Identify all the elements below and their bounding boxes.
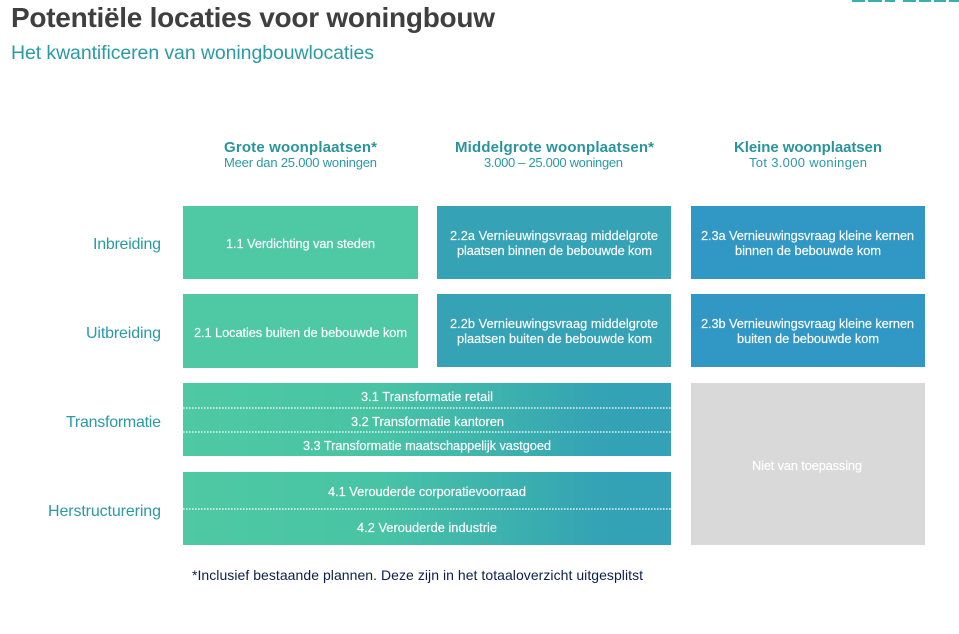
panel: 2.3b: 2.3b Vernieuwingsvraag kleine kernen <box>701 316 914 331</box>
3.2 label: 3.2 Transformatie kantoren <box>351 414 504 429</box>
panel: 2.3a: 2.3a Vernieuwingsvraag kleine kernen <box>701 228 914 243</box>
footnote: *Inclusief bestaande plannen. Deze zijn in het totaaloverzicht uitgesplitst <box>192 567 643 583</box>
column header: Middelgrote woonplaatsen: 3.000 – 25.000 woningen <box>484 155 623 170</box>
panel: 2.3b <box>691 294 925 367</box>
3.3 label: 3.3 Transformatie maatschappelijk vastgoed <box>303 438 551 453</box>
3.1 label: 3.1 Transformatie retail <box>361 389 493 404</box>
column header: Grote woonplaatsen: Grote woonplaatsen* <box>224 139 377 156</box>
row label: Herstructurering: Herstructurering <box>48 503 161 520</box>
panel: 2.2b: plaatsen buiten de bebouwde kom <box>457 331 652 346</box>
column header: Grote woonplaatsen <box>224 139 377 170</box>
column header: Kleine woonplaatsen: Kleine woonplaatsen <box>734 139 882 156</box>
panel: 2.2a <box>437 206 671 279</box>
panel: 2.2b <box>437 294 671 367</box>
panel: niet van toepassing <box>691 383 925 545</box>
panel: 2.2a: 2.2a Vernieuwingsvraag middelgrote <box>450 228 658 243</box>
panel: transformatie <box>183 383 671 456</box>
row label: Uitbreiding: Uitbreiding <box>86 325 161 342</box>
panel: 1.1 <box>183 206 418 279</box>
row label: Inbreiding: Inbreiding <box>93 236 161 253</box>
column header: Grote woonplaatsen: Meer dan 25.000 woningen <box>224 155 377 170</box>
panel: 2.3a <box>691 206 925 279</box>
title: Potentiële locaties voor woningbouw <box>11 2 495 33</box>
row label: Transformatie: Transformatie <box>66 414 161 431</box>
column header: Middelgrote woonplaatsen: Middelgrote woonplaatsen* <box>455 139 654 156</box>
panel: niet van toepassing: Niet van toepassing <box>752 458 862 473</box>
panel: 2.3b: buiten de bebouwde kom <box>737 331 879 346</box>
panel: herstructurering <box>183 472 671 545</box>
cropped logo fragment <box>852 0 959 2</box>
panel: 2.2b: 2.2b Vernieuwingsvraag middelgrote <box>450 316 658 331</box>
panel: 2.2a: plaatsen binnen de bebouwde kom <box>457 243 652 258</box>
panel: 2.3a: binnen de bebouwde kom <box>735 243 881 258</box>
column header: Kleine woonplaatsen: Tot 3.000 woningen <box>749 155 867 170</box>
column header: Kleine woonplaatsen <box>734 139 882 170</box>
panel: 1.1: 1.1 Verdichting van steden <box>226 236 375 251</box>
panel: 2.1: 2.1 Locaties buiten de bebouwde kom <box>194 325 407 340</box>
4.1 label: 4.1 Verouderde corporatievoorraad <box>328 484 526 499</box>
4.2 label: 4.2 Verouderde industrie <box>357 520 497 535</box>
column header: Middelgrote woonplaatsen <box>455 139 654 170</box>
subtitle: Het kwantificeren van woningbouwlocaties <box>11 42 374 64</box>
panel: 2.1 <box>183 294 418 368</box>
